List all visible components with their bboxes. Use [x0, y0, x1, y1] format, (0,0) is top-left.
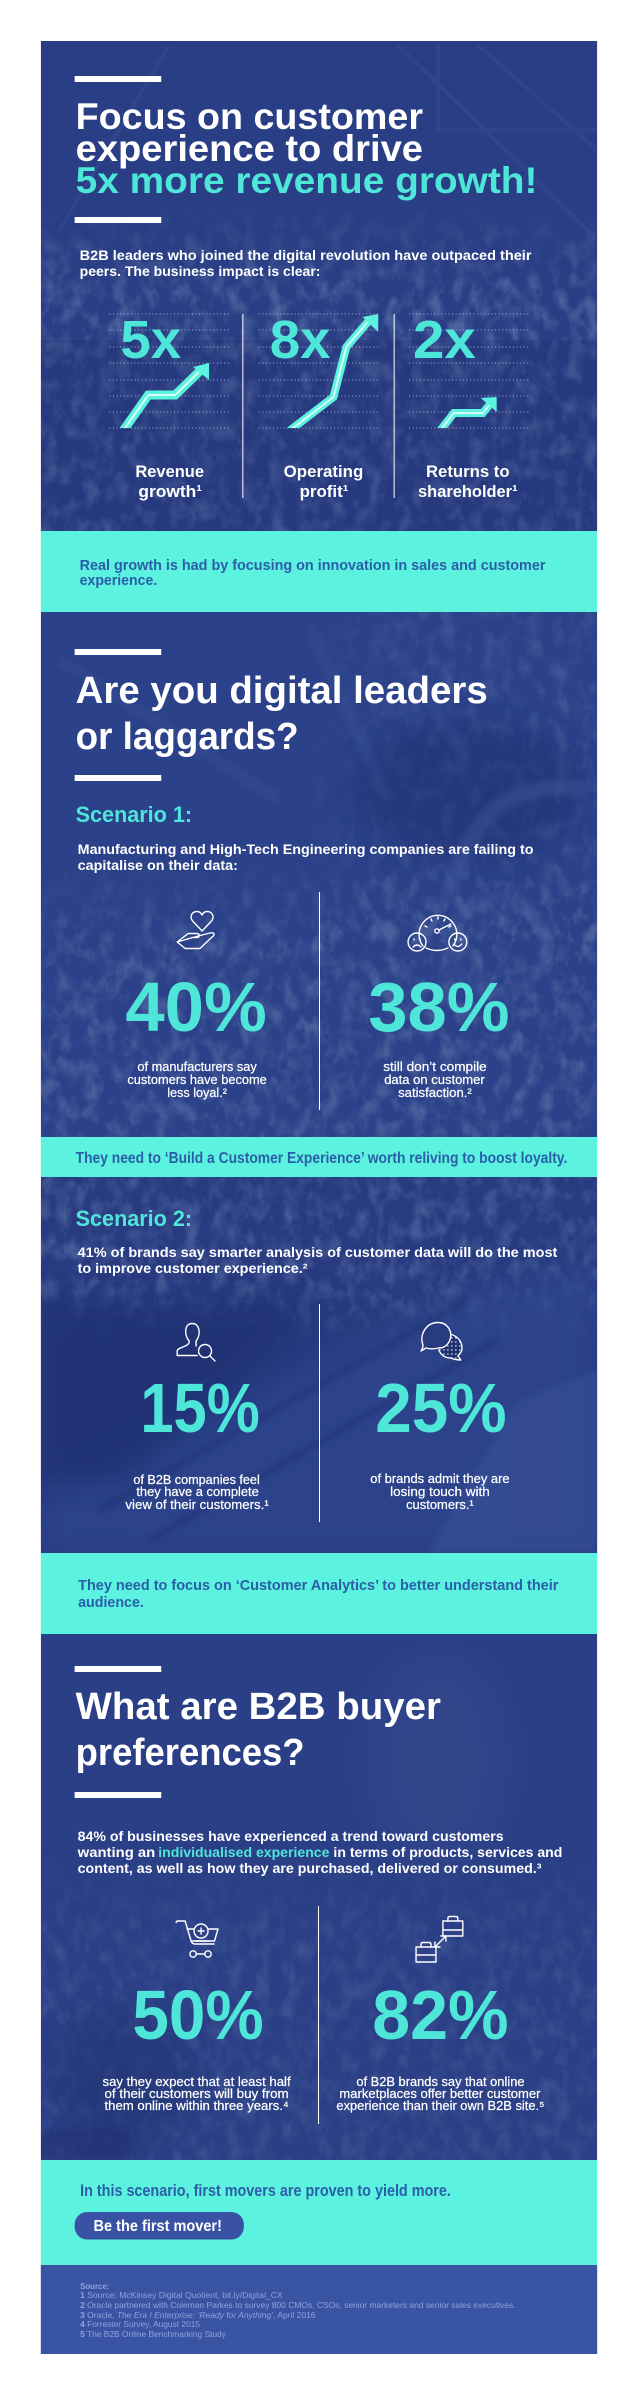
stat: operating profit: profit¹: [300, 483, 348, 501]
stat: operating profit: [270, 310, 378, 501]
callout text: first movers: In this scenario, first movers are proven to yield more.: [80, 2182, 451, 2200]
scenario 2 text: [78, 1244, 558, 1276]
icon: heart in hand: [177, 912, 214, 948]
stat: 38%: data on customer: [384, 1073, 485, 1087]
intro text: B2B leaders who joined the digital revolution have outpaced their: [80, 247, 532, 263]
stat: 40%: [125, 968, 267, 1100]
source list: [80, 2291, 516, 2339]
heading: scenario 1: Scenario 1:: [76, 802, 192, 827]
stat: returns to shareholder: [413, 310, 518, 501]
panel: buyer preferences background: [41, 1634, 597, 2160]
scenario 1 text: [78, 841, 533, 873]
stat: 50%: of their customers will buy from: [105, 2087, 289, 2101]
panel: teal callout band three: [41, 1553, 597, 1634]
title block: [75, 76, 537, 223]
buyer preferences text: in terms of products, services and: [333, 1844, 562, 1860]
callout text: real growth: experience.: [80, 573, 157, 589]
stat: 50%: 50%: [132, 1976, 264, 2054]
callout text: customer analytics: [78, 1578, 559, 1611]
stat: 25%: 25%: [375, 1369, 507, 1447]
heading: digital leaders or laggards: [75, 649, 488, 781]
icon: person search: [177, 1324, 215, 1361]
callout text: customer analytics: They need to focus on ‘Customer Analytics’ to better understand their: [78, 1578, 559, 1594]
icon: satisfaction gauge: [408, 915, 467, 951]
stat: 15%: [125, 1369, 269, 1512]
callout text: build a customer experience: They need to ‘Build a Customer Experience’ worth reliving to boost loyalty.: [76, 1150, 567, 1167]
source list: 2 Oracle partnered with Coleman Parkes to survey 800 CMOs, CSOs, senior marketers and senior sales executives.: [80, 2301, 516, 2310]
stat: returns to shareholder: 2x: [413, 310, 476, 370]
stat: 15%: view of their customers.¹: [125, 1498, 269, 1512]
source list: 3 Oracle, The Era I Enterprise: ‘Ready for Anything’ , April 2016: [80, 2311, 316, 2320]
heading: buyer preferences: preferences?: [76, 1732, 305, 1774]
stat: 82%: marketplaces offer better customer: [339, 2087, 540, 2101]
stat: revenue growth: growth¹: [138, 483, 202, 501]
stat: 82%: 82%: [372, 1976, 509, 2054]
button: be the first mover: [75, 2212, 244, 2240]
chart: business impact multiples: [109, 310, 529, 501]
stat: 15%: of B2B companies feel: [133, 1473, 260, 1487]
stat: 25%: [370, 1369, 510, 1512]
source list: 4 Forrester Survey, August 2015: [80, 2320, 201, 2329]
stat: 82%: experience than their own B2B site.⁵: [336, 2099, 544, 2113]
stat: 40%: 40%: [125, 968, 267, 1046]
panel: teal callout band two: [41, 1137, 597, 1177]
callout text: customer analytics: audience.: [78, 1595, 144, 1611]
title block: Focus on customer: [76, 96, 423, 137]
stat: 50%: [103, 1976, 291, 2113]
divider: scenario 2: [318, 1304, 320, 1522]
scenario 2 text: 41% of brands say smarter analysis of customer data will do the most: [78, 1244, 558, 1260]
scenario 1 text: capitalise on their data:: [78, 857, 238, 873]
stat: 50%: them online within three years.⁴: [105, 2099, 289, 2113]
callout text: real growth: [80, 558, 546, 589]
stat: 25%: customers.¹: [406, 1498, 474, 1512]
stat: revenue growth: [119, 310, 209, 501]
panel: teal callout band one: [41, 531, 597, 612]
callout text: real growth: Real growth is had by focusing on innovation in sales and customer: [80, 558, 546, 574]
panel: sources footer: [41, 2265, 597, 2354]
stat: 38%: 38%: [368, 968, 510, 1046]
source list: 5 The B2B Online Benchmarking Study: [80, 2330, 226, 2339]
stat: 40%: less loyal.²: [167, 1086, 227, 1100]
stat: 25%: losing touch with: [390, 1485, 490, 1499]
stat: 38%: still don’t compile: [383, 1060, 487, 1074]
stat: revenue growth: 5x: [120, 310, 181, 370]
panel: scenario one background: [41, 612, 597, 1137]
stat: 38%: satisfaction.²: [398, 1086, 472, 1100]
stat: 15%: they have a complete: [136, 1485, 259, 1499]
buyer preferences text: [77, 1828, 562, 1876]
heading: buyer preferences: [75, 1666, 441, 1798]
scenario 1 text: Manufacturing and High-Tech Engineering companies are failing to: [78, 841, 533, 857]
buyer preferences text: wanting an: [77, 1844, 155, 1860]
stat: 38%: [368, 968, 510, 1100]
stat: returns to shareholder: Returns to: [426, 463, 510, 481]
divider: scenario 1: [318, 892, 320, 1110]
stat: operating profit: Operating: [284, 463, 363, 481]
icon: briefcases exchange: [416, 1916, 463, 1962]
title block: 5x more revenue growth!: [76, 160, 537, 201]
stat: 25%: of brands admit they are: [370, 1472, 510, 1486]
heading: digital leaders or laggards: or laggards?: [76, 716, 299, 758]
buyer preferences text: individualised experience: [158, 1844, 330, 1860]
source heading: Source:: [80, 2282, 109, 2291]
panel: scenario two background: [41, 1177, 597, 1553]
stat: revenue growth: Revenue: [135, 463, 204, 481]
stat: 15%: 15%: [140, 1369, 260, 1447]
buyer preferences text: content, as well as how they are purchased, delivered or consumed.³: [78, 1860, 542, 1876]
icon: chat bubbles: [421, 1322, 462, 1360]
heading: digital leaders or laggards: Are you digital leaders: [76, 670, 488, 712]
intro text: peers. The business impact is clear:: [80, 263, 320, 279]
stat: 40%: of manufacturers say: [137, 1060, 258, 1074]
buyer preferences text: 84% of businesses have experienced a trend toward customers: [78, 1828, 504, 1844]
stat: returns to shareholder: shareholder¹: [418, 483, 518, 501]
stat: 82%: [336, 1976, 544, 2113]
heading: buyer preferences: What are B2B buyer: [76, 1686, 441, 1728]
panel: hero section background: [41, 41, 597, 531]
stat: 40%: customers have become: [127, 1073, 267, 1087]
stat: operating profit: 8x: [270, 310, 330, 370]
stat: 82%: of B2B brands say that online: [356, 2075, 525, 2089]
title block: experience to drive: [76, 128, 423, 169]
source list: 1 Source: McKinsey Digital Quotient, bit.ly/Digital_CX: [80, 2291, 283, 2300]
button: be the first mover: Be the first mover!: [94, 2218, 222, 2235]
divider: buyer preferences: [318, 1906, 320, 2124]
intro text: [80, 247, 532, 279]
panel: first mover band: [41, 2160, 597, 2265]
icon: shopping cart with plus: [176, 1921, 218, 1957]
heading: scenario 2: Scenario 2:: [76, 1206, 192, 1231]
scenario 2 text: to improve customer experience.²: [78, 1260, 308, 1276]
stat: 50%: say they expect that at least half: [103, 2075, 291, 2089]
